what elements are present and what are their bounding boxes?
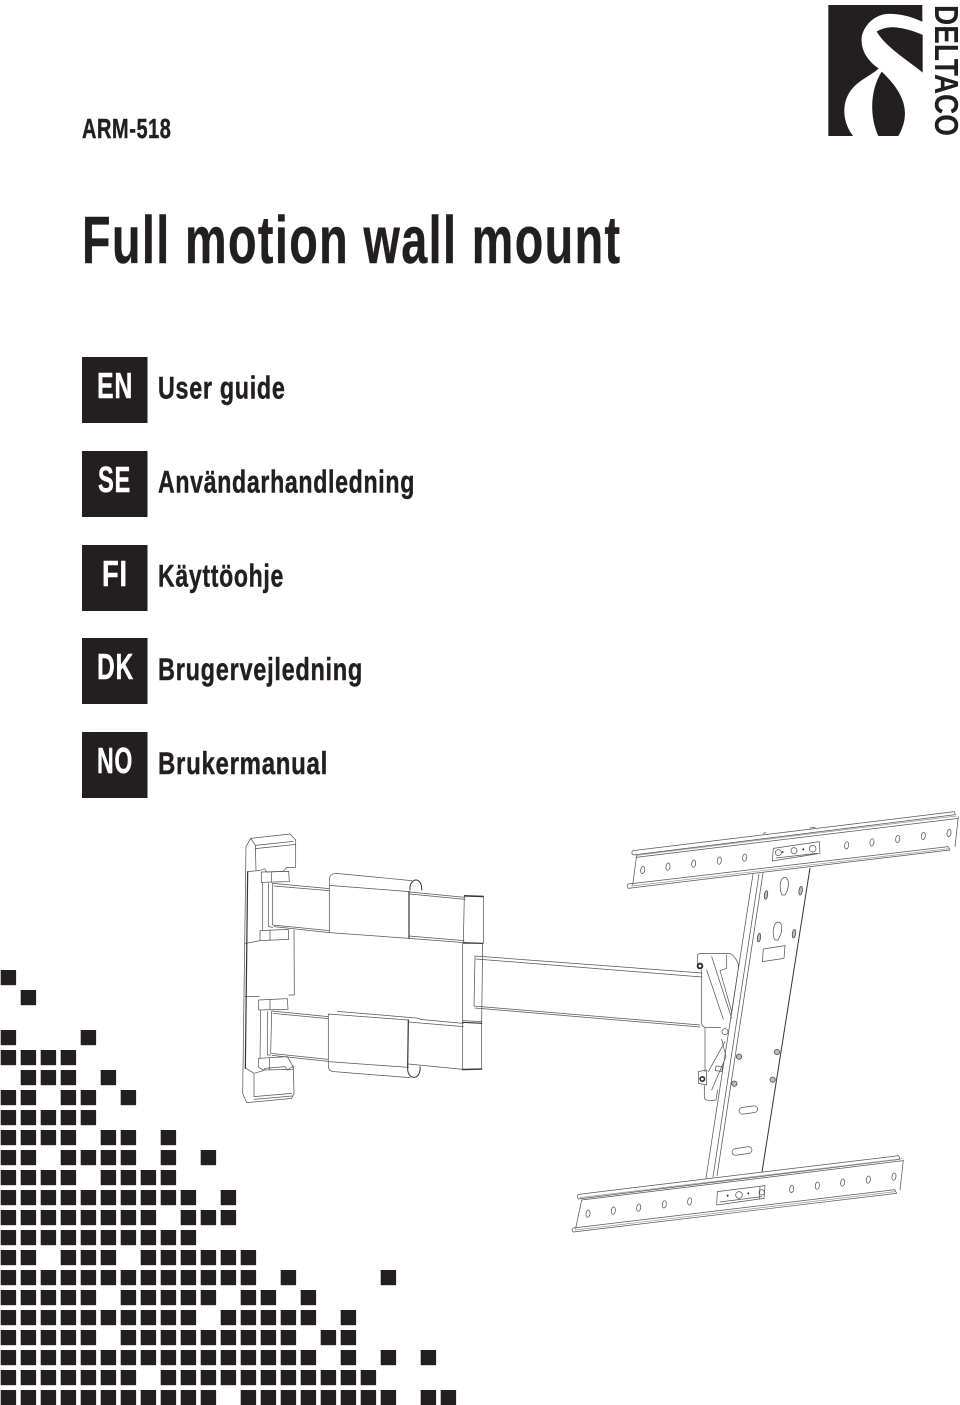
wall plate and double arms (243, 834, 483, 1103)
language row: NO: Brukermanual (158, 745, 328, 781)
plate holes upper (757, 877, 803, 962)
language row: SE (82, 451, 415, 517)
tilt bracket (697, 953, 738, 1101)
wall mount line drawing (243, 812, 958, 1232)
central arm (474, 956, 702, 1027)
language row: FI (82, 545, 284, 611)
language row: FI: FI (102, 553, 128, 594)
language row: EN (82, 357, 286, 423)
language row: NO: NO (97, 740, 133, 781)
hinge blocks (259, 871, 293, 1070)
title: Full motion wall mount (82, 203, 622, 278)
language row: SE: Användarhandledning (158, 464, 415, 500)
lower elbow hinge (463, 1021, 482, 1070)
language row: DK (82, 638, 363, 704)
pixel mosaic pattern (1, 970, 456, 1405)
logo emblem (828, 5, 923, 136)
upper arm with sleeve (273, 873, 465, 943)
language row: EN: User guide (158, 370, 286, 406)
language row: FI: Käyttöohje (158, 558, 284, 594)
language row: DK: Brugervejledning (158, 651, 363, 687)
language row: SE: SE (98, 459, 131, 500)
top rail (627, 812, 958, 888)
language row: NO (82, 732, 328, 798)
logo: Deltaco (828, 5, 960, 136)
language row: DK: DK (97, 646, 134, 687)
lower arm with sleeve (271, 1011, 463, 1078)
upper elbow hinge (463, 895, 483, 1022)
vertical TV plate (706, 868, 810, 1178)
model number: ARM-518 (82, 113, 172, 144)
language row: EN: EN (97, 365, 133, 406)
bottom rail (572, 1156, 903, 1232)
plate holes lower (732, 1049, 780, 1156)
wall plate outline (243, 834, 296, 1103)
